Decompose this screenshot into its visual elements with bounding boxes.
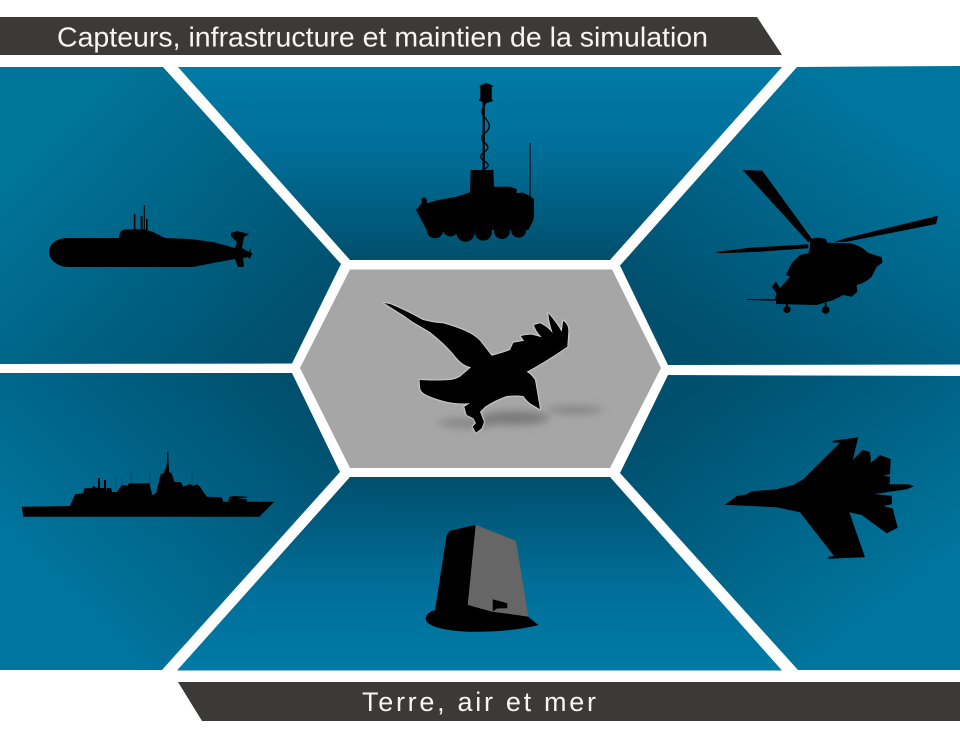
panel: armoured vehicle (178, 67, 782, 260)
footer banner (178, 682, 960, 721)
header banner: Capteurs, infrastructure et maintien de la simulation (57, 22, 708, 52)
panel: fighter jet (620, 375, 960, 670)
icon: submarine (49, 205, 253, 267)
footer banner: Terre, air et mer (362, 687, 596, 717)
icon: sensor vehicle (416, 83, 534, 242)
icon: frigate (22, 452, 274, 517)
icon: fighter jet (725, 437, 914, 559)
panel: radar (177, 477, 782, 670)
panel: frigate (0, 373, 340, 670)
icon: radar tower (426, 525, 538, 632)
header banner (0, 17, 782, 55)
icon: helicopter (715, 170, 938, 314)
panel: centre raven (300, 270, 661, 468)
panel: helicopter (620, 66, 960, 365)
panel: submarine (0, 67, 341, 364)
shadow: raven (438, 406, 603, 428)
icon: raven (384, 303, 568, 433)
